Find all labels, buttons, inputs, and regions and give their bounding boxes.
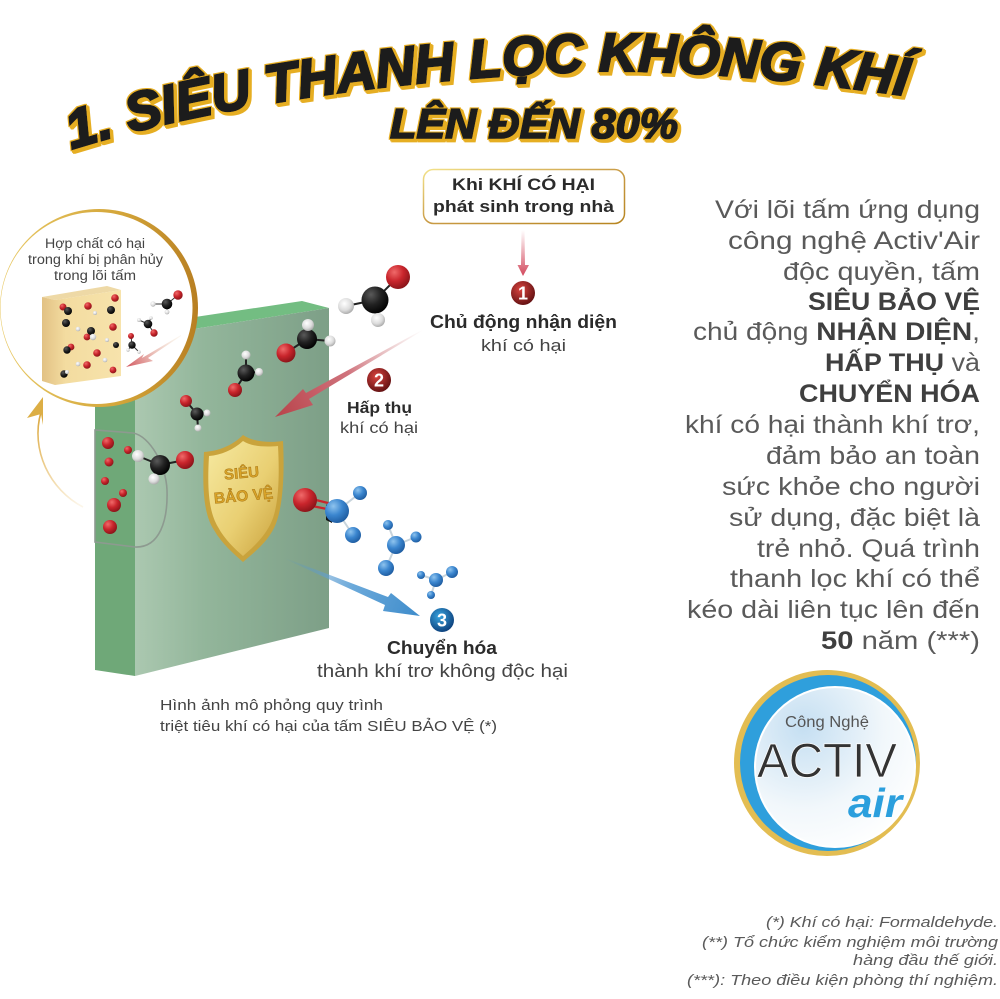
step 3 badge: 3 — [437, 610, 447, 630]
arrow 1: red down — [518, 230, 529, 276]
arrow 2: red to board — [275, 330, 422, 417]
body text block: công nghệ Activ'Air — [728, 227, 980, 255]
molecules: inert gas — [293, 486, 458, 599]
step 3 label: thành khí trơ không độc hại — [317, 661, 568, 681]
logo ACTIV wordmark: ACTIV — [757, 735, 897, 788]
body text block: sử dụng, đặc biệt là — [729, 504, 980, 532]
magnifier caption: trong lõi tấm — [54, 268, 136, 283]
shield label: BẢO VỆ — [213, 484, 274, 508]
small molecules in magnifier — [126, 290, 183, 354]
body text block: khí có hại thành khí trơ, — [685, 411, 980, 439]
step 1 label: khí có hại — [481, 336, 566, 355]
step 1 badge — [511, 281, 535, 305]
panel: green protective board — [95, 301, 329, 676]
magnifier caption — [28, 236, 163, 283]
magnifier caption: Hợp chất có hại — [45, 236, 145, 251]
body text block: thanh lọc khí có thể — [730, 565, 980, 593]
callout: when harmful gas arises: Khi KHÍ CÓ HẠI — [452, 175, 595, 194]
caption under illustration — [160, 697, 497, 735]
step 2 label: Hấp thụ — [347, 400, 412, 417]
red particles in board — [101, 437, 132, 534]
core cube with particles — [42, 286, 121, 385]
footnotes: (*) Khí có hại: Formaldehyde. — [766, 914, 998, 931]
molecules: harmful gas — [132, 265, 410, 484]
caption under illustration: triệt tiêu khí có hại của tấm SIÊU BẢO VỆ (*) — [160, 718, 497, 735]
step 2 label — [340, 400, 418, 437]
arrow: gold curved to magnifier — [27, 397, 83, 507]
zoom frame on board edge — [95, 430, 167, 547]
shield label: SIÊU — [223, 463, 260, 484]
callout: when harmful gas arises — [424, 170, 624, 224]
shield emblem — [203, 435, 284, 562]
step 3 label — [317, 638, 568, 681]
body text block: HẤP THỤ và — [825, 348, 980, 377]
arrow inside magnifier — [126, 335, 181, 367]
arrow 3: blue — [285, 558, 420, 616]
magnifier caption: trong khí bị phân hủy — [28, 252, 163, 267]
step 2 badge: 2 — [374, 370, 384, 390]
step 3 label: Chuyển hóa — [387, 638, 498, 658]
title: second line: LÊN ĐẾN 80% — [390, 99, 678, 147]
step 2 label: khí có hại — [340, 420, 418, 437]
body text block: chủ động NHẬN DIỆN , — [693, 316, 980, 346]
body text block: đảm bảo an toàn — [766, 442, 980, 470]
step 3 badge — [430, 608, 454, 632]
body text block: Với lõi tấm ứng dụng — [715, 196, 980, 224]
step 1 label — [430, 312, 617, 355]
footnotes: hàng đầu thế giới. — [853, 952, 998, 969]
step 1 badge: 1 — [518, 284, 528, 304]
body text block — [685, 196, 980, 655]
step 2 badge — [367, 368, 391, 392]
logo air wordmark: air — [848, 780, 904, 826]
body text block: CHUYỂN HÓA — [799, 378, 980, 408]
footnotes: (***): Theo điều kiện phòng thí nghiệm. — [687, 972, 998, 989]
body text block: sức khỏe cho người — [722, 473, 980, 501]
magnifier circle — [0, 209, 198, 407]
footnotes — [687, 914, 999, 989]
body text block: SIÊU BẢO VỆ — [808, 286, 980, 316]
body text block: 50 năm (***) — [821, 627, 980, 655]
callout: when harmful gas arises: phát sinh trong nhà — [433, 197, 615, 216]
title: first line: 1. SIÊU THANH LỌC KHÔNG KHÍ — [68, 23, 926, 154]
body text block: kéo dài liên tục lên đến — [687, 596, 980, 624]
footnotes: (**) Tổ chức kiểm nghiệm môi trường — [702, 934, 999, 951]
logo text: Công Nghệ — [785, 714, 869, 731]
logo: Activ Air badge — [734, 670, 920, 856]
step 1 label: Chủ động nhận diện — [430, 312, 617, 332]
caption under illustration: Hình ảnh mô phỏng quy trình — [160, 697, 383, 714]
body text block: độc quyền, tấm — [783, 258, 980, 286]
body text block: trẻ nhỏ. Quá trình — [757, 535, 980, 563]
